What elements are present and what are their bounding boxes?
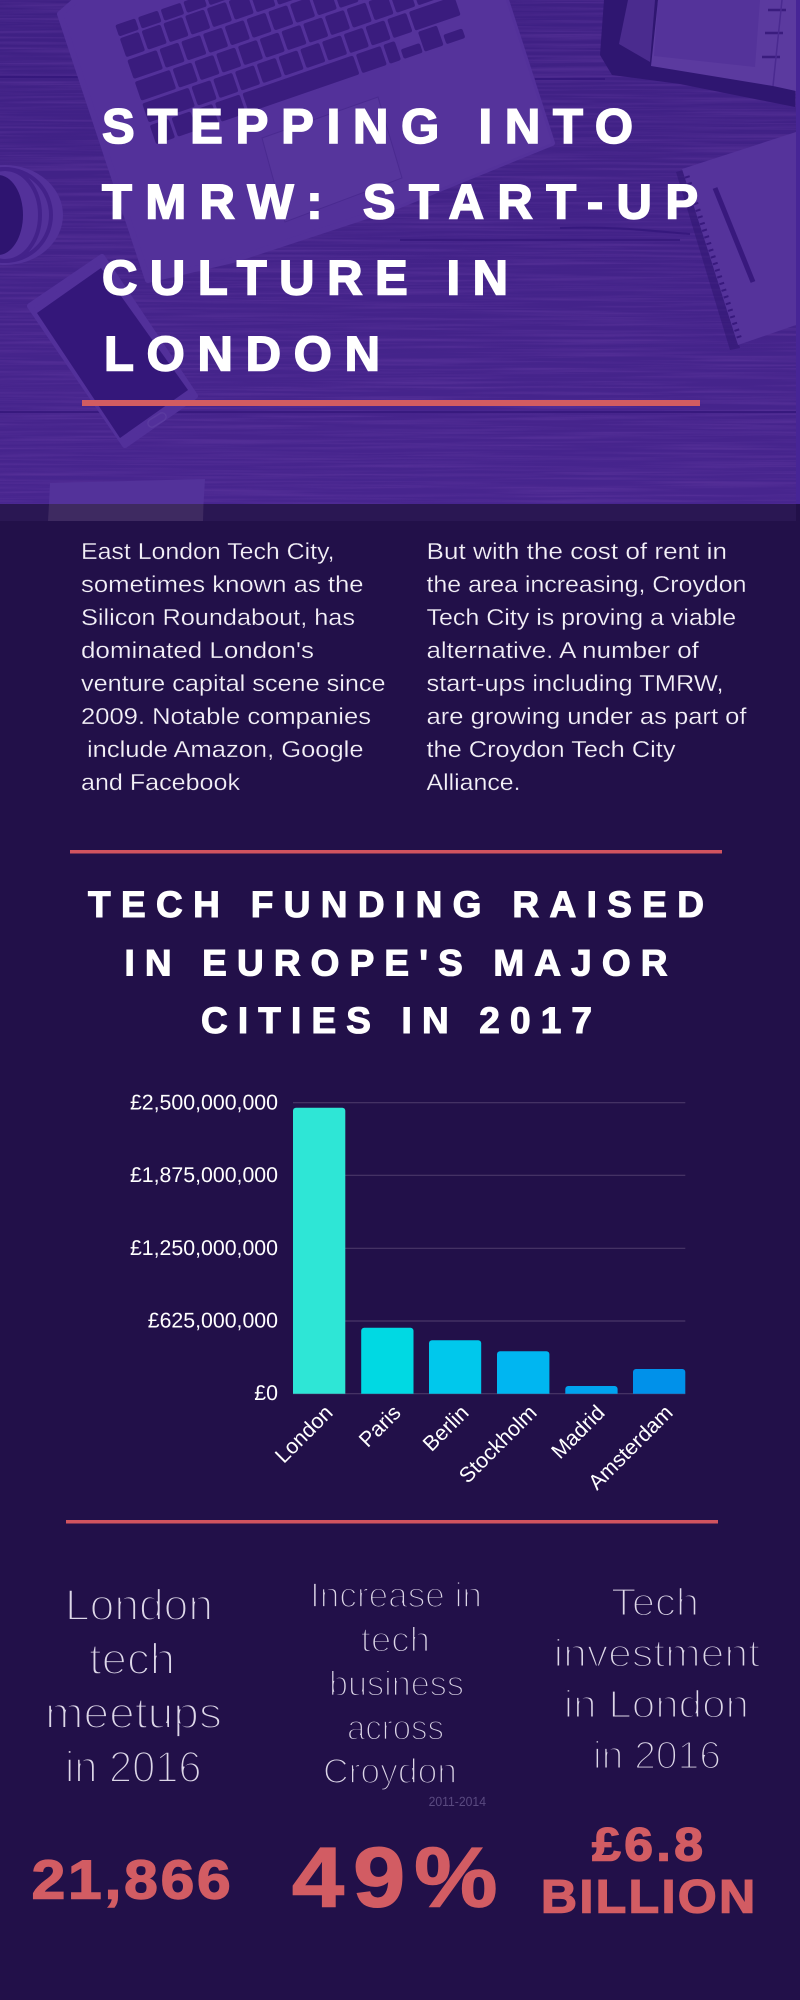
text block: Croydon Tech City: are growing under as part of xyxy=(426,703,747,729)
icon: spiral notebook and pencil right xyxy=(676,132,796,350)
text block: Croydon Tech City: alternative. A number of xyxy=(426,637,700,663)
stat: tech investment in London: investment xyxy=(554,1633,760,1676)
text block: Croydon Tech City: start-ups including TMRW, xyxy=(426,670,724,696)
x axis labels: Stockholm xyxy=(454,1401,542,1488)
text block: East London Tech City: sometimes known as the xyxy=(81,571,364,597)
stat: London tech meetups: London xyxy=(65,1581,213,1630)
stat: increase in tech business across Croydon: tech xyxy=(361,1621,430,1660)
x axis labels: London xyxy=(270,1401,338,1468)
hero title: STEPPING INTO xyxy=(102,100,633,154)
text block: East London Tech City xyxy=(81,538,386,795)
stat: increase in tech business across Croydon xyxy=(292,1576,497,1926)
hero photo: desk with laptop, notebook and phone xyxy=(0,0,800,521)
y axis labels: £625,000,000 xyxy=(148,1309,278,1333)
hero divider line xyxy=(82,400,700,406)
x axis labels: Berlin xyxy=(418,1401,474,1456)
stat: London tech meetups: meetups xyxy=(45,1689,222,1738)
bars xyxy=(293,1108,685,1394)
text block: East London Tech City: 2009. Notable companies xyxy=(81,703,371,729)
y axis labels: £1,875,000,000 xyxy=(130,1163,278,1187)
stat value xyxy=(541,1818,755,1923)
y axis labels xyxy=(130,1090,278,1405)
section divider line xyxy=(70,850,722,854)
section divider line xyxy=(66,1520,718,1524)
text block: East London Tech City: dominated London's xyxy=(81,637,314,663)
laptop keyboard xyxy=(115,0,471,144)
stat value: 49% xyxy=(292,1831,497,1926)
y axis labels: £0 xyxy=(254,1381,278,1405)
text block: Croydon Tech City: Alliance. xyxy=(426,769,520,795)
stat: increase in tech business across Croydon: across xyxy=(347,1708,444,1747)
icon: phone xyxy=(30,257,195,445)
stat: increase in tech business across Croydon: Increase in xyxy=(310,1576,482,1615)
hero title xyxy=(102,100,698,382)
date note: 2011-2014 xyxy=(429,1794,486,1809)
stat: increase in tech business across Croydon: business xyxy=(329,1665,464,1704)
stat: tech investment in London xyxy=(541,1582,760,1923)
text block: Croydon Tech City: But with the cost of rent in xyxy=(426,538,727,564)
text block: Croydon Tech City: Tech City is proving a viable xyxy=(426,604,736,630)
stat: tech investment in London: in 2016 xyxy=(593,1735,721,1778)
x axis labels xyxy=(270,1401,678,1495)
stat: tech investment in London: in London xyxy=(564,1684,749,1727)
dark fade band at the foot of the hero xyxy=(0,504,796,521)
text block: Croydon Tech City: the Croydon Tech City xyxy=(426,736,676,762)
chart heading: TECH FUNDING RAISED xyxy=(88,884,704,925)
stat: London tech meetups: tech xyxy=(89,1635,175,1684)
stat value: £6.8 xyxy=(592,1818,703,1871)
bar chart: tech funding by city xyxy=(130,1090,685,1495)
x axis labels: Paris xyxy=(354,1401,406,1452)
text block: East London Tech City: venture capital scene since xyxy=(81,670,386,696)
text block: East London Tech City: Silicon Roundabout, has xyxy=(81,604,355,630)
chart heading: IN EUROPE'S MAJOR xyxy=(124,942,668,984)
icon: laptop xyxy=(60,0,552,280)
x axis labels: Amsterdam xyxy=(584,1401,678,1495)
icon: sticky note xyxy=(48,479,205,521)
stat: London tech meetups xyxy=(32,1581,231,1910)
stat value: 21,866 xyxy=(32,1848,231,1910)
chart heading xyxy=(88,884,704,1041)
stat: London tech meetups: in 2016 xyxy=(65,1743,202,1792)
y axis labels: £2,500,000,000 xyxy=(130,1090,278,1114)
text block: East London Tech City: include Amazon, Google xyxy=(87,736,364,762)
icon: coffee mug xyxy=(0,165,63,265)
text block: Croydon Tech City: the area increasing, Croydon xyxy=(426,571,746,597)
text block: East London Tech City: East London Tech City, xyxy=(81,538,335,564)
hero title: CULTURE IN xyxy=(102,252,508,306)
chart heading: CITIES IN 2017 xyxy=(201,1000,592,1041)
stat value: BILLION xyxy=(541,1870,755,1923)
x axis labels: Madrid xyxy=(547,1401,610,1464)
y axis labels: £1,250,000,000 xyxy=(130,1236,278,1260)
hero title: LONDON xyxy=(104,328,380,382)
text block: Croydon Tech City xyxy=(426,538,747,795)
text block: East London Tech City: and Facebook xyxy=(81,769,241,795)
stat: tech investment in London: Tech xyxy=(611,1582,699,1625)
laptop trackpad xyxy=(262,97,402,222)
stat: increase in tech business across Croydon: Croydon xyxy=(323,1752,457,1791)
hero title: TMRW: START-UP xyxy=(102,176,698,230)
icon: organiser notebook top right xyxy=(600,0,796,107)
